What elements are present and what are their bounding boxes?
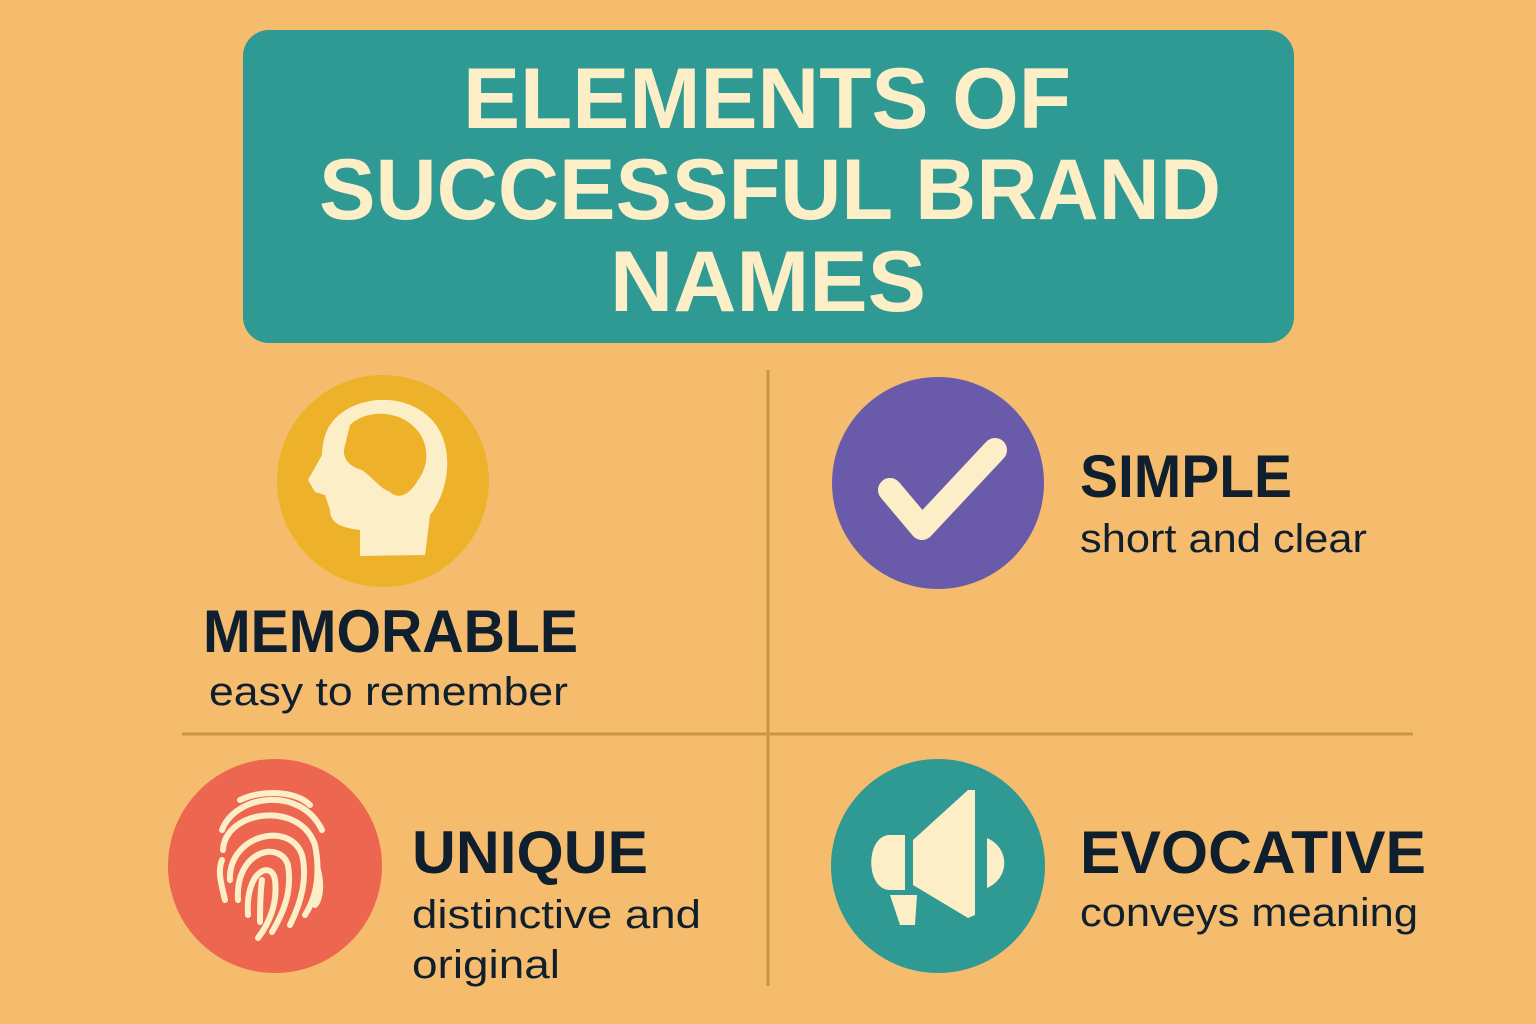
panel: simple: SIMPLE [1080,443,1292,510]
panel: memorable: easy to remember [209,670,568,714]
icon: checkmark [832,377,1044,589]
panel: evocative: EVOCATIVE [1080,819,1426,886]
panel: simple [832,377,1367,589]
panel: memorable [203,375,578,714]
icon: head [277,375,489,587]
panel: unique: distinctive and [412,893,701,937]
panel: memorable: MEMORABLE [203,598,578,665]
panel: evocative: conveys meaning [1080,891,1418,935]
title [243,30,1294,343]
panel: simple: short and clear [1080,517,1367,561]
title: NAMES [610,234,926,330]
title: ELEMENTS OF [463,51,1071,147]
panel: evocative [831,759,1426,973]
panel: unique [168,759,701,987]
icon: fingerprint [168,759,382,973]
panel: unique: original [412,943,560,987]
icon: megaphone [831,759,1045,973]
panel: unique: UNIQUE [412,819,648,886]
title: SUCCESSFUL BRAND [319,142,1221,238]
